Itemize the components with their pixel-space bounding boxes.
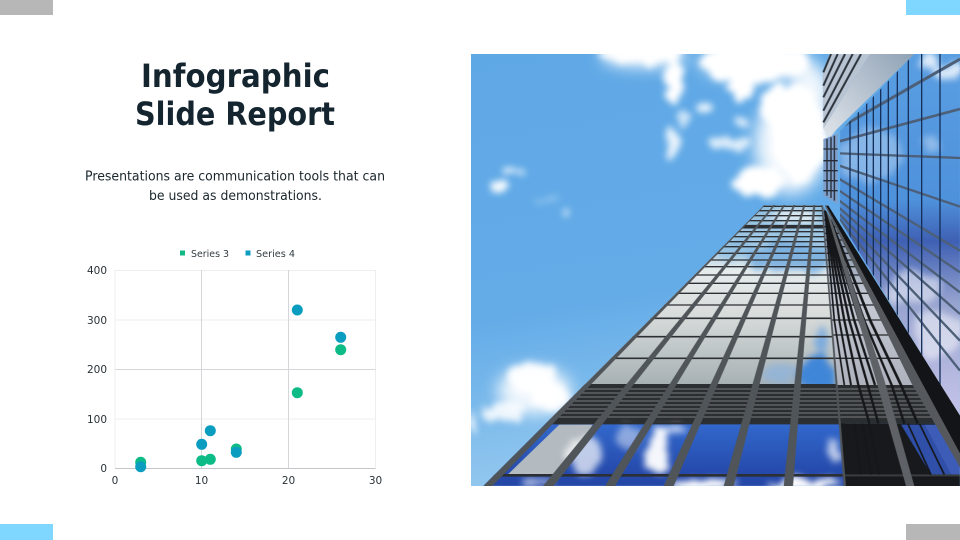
photo: skyscraper against blue sky xyxy=(468,43,960,490)
chart legend xyxy=(180,249,295,260)
chart axis labels: 0 xyxy=(112,475,118,487)
grey diagonal edge xyxy=(825,206,960,467)
facade reflections xyxy=(711,211,836,394)
side face fins xyxy=(825,211,944,475)
scatter chart xyxy=(87,249,382,487)
corner bar: bottom right xyxy=(906,524,960,540)
facade floors xyxy=(492,206,843,477)
upper tower: light band xyxy=(823,54,914,138)
description text xyxy=(85,170,385,204)
description text: Presentations are communication tools that can xyxy=(85,170,385,184)
side face floors xyxy=(824,219,900,359)
chart axis labels xyxy=(87,265,382,487)
data points: series 3 xyxy=(135,344,346,468)
chart axis labels: 20 xyxy=(282,475,295,487)
lower glass xyxy=(484,424,844,486)
chart axis labels: 400 xyxy=(87,265,107,277)
black structural diagonal xyxy=(825,206,960,453)
chart axis labels: 300 xyxy=(87,315,107,327)
upper tower: glass grid xyxy=(823,52,960,421)
chart legend: Series 4 xyxy=(256,249,295,260)
title: Infographic xyxy=(141,57,330,95)
chart gridlines xyxy=(115,270,376,468)
tower floors xyxy=(839,59,960,371)
title: Slide Report xyxy=(135,95,335,133)
clouds xyxy=(468,43,831,433)
corner bar: top right xyxy=(906,0,960,15)
data points: series 4 xyxy=(135,304,346,472)
tower columns xyxy=(850,54,940,421)
corner bar: bottom left xyxy=(0,524,53,540)
upper tower: overhang stripes xyxy=(823,54,870,129)
chart axis labels: 0 xyxy=(100,463,107,475)
upper tower: low section xyxy=(823,134,838,204)
building side face xyxy=(818,204,960,486)
facade mullions xyxy=(481,205,854,486)
title xyxy=(135,57,335,133)
chart axis labels: 200 xyxy=(87,364,107,376)
corner bar: top left xyxy=(0,0,53,15)
main building facade xyxy=(471,205,960,490)
chart axis labels: 100 xyxy=(87,414,107,426)
description text: be used as demonstrations. xyxy=(149,189,322,204)
chart axis labels: 10 xyxy=(195,475,208,487)
chart axis labels: 30 xyxy=(369,475,382,487)
sky xyxy=(471,54,960,486)
side face grey mullion xyxy=(825,207,914,486)
chart legend: Series 3 xyxy=(191,249,229,260)
louver band xyxy=(546,385,839,424)
